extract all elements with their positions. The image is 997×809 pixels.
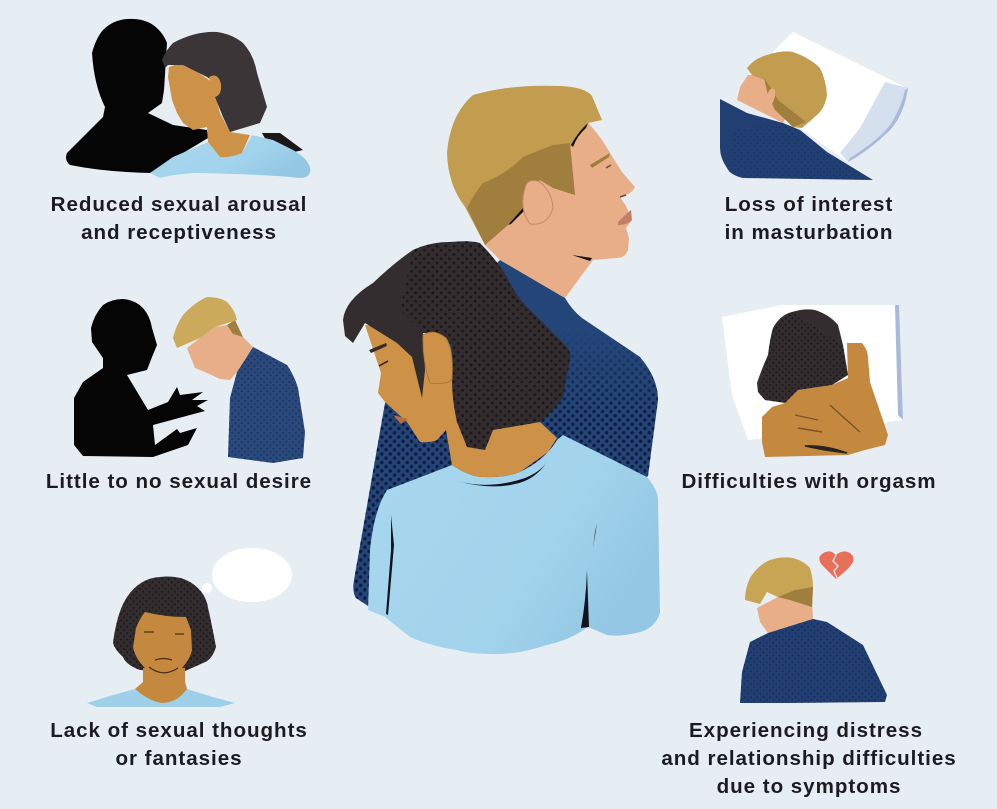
- icon: man from behind: [740, 557, 887, 703]
- panel: difficulties with orgasm: [681, 305, 937, 493]
- heading: Lack of sexual thoughts: [50, 719, 308, 742]
- panel: little to no sexual desire: [46, 297, 312, 493]
- icon: person in bed: [720, 32, 908, 180]
- icon: person on pillow: [722, 305, 903, 457]
- heading: Experiencing distress: [689, 719, 923, 742]
- heading: Loss of interest: [725, 193, 893, 216]
- panel: distress: [661, 551, 957, 798]
- panel: distress: due to symptoms: [717, 775, 901, 798]
- panel: lack of sexual thoughts: or fantasies: [116, 747, 242, 770]
- man hair: [447, 86, 602, 245]
- panel: lack of sexual thoughts: [50, 548, 308, 770]
- heading: Difficulties with orgasm: [681, 470, 937, 493]
- man neck and face: [485, 123, 635, 298]
- man ear: [523, 181, 553, 224]
- icon: broken heart: [819, 551, 853, 579]
- man shirt: [353, 260, 658, 606]
- panel: reduced sexual arousal: [51, 19, 310, 244]
- panel: loss of interest in masturbation: [720, 32, 908, 244]
- icon: silhouette and man: [74, 297, 305, 463]
- woman hair: [343, 241, 571, 450]
- panel: loss of interest in masturbation: in masturbation: [725, 221, 893, 244]
- icon: woman with thought bubble: [87, 548, 292, 707]
- woman face details: [369, 343, 387, 353]
- man face details: [508, 123, 592, 261]
- heading: Little to no sexual desire: [46, 470, 312, 493]
- woman ear: [423, 332, 452, 384]
- icon: silhouette and woman: [66, 19, 310, 178]
- panel: reduced sexual arousal: and receptiveness: [81, 221, 277, 244]
- shirt fold lines: [386, 515, 597, 628]
- heading: Reduced sexual arousal: [51, 193, 307, 216]
- panel: distress: and relationship difficulties: [661, 747, 957, 770]
- woman neck and face: [365, 325, 557, 477]
- woman shirt: [368, 435, 660, 654]
